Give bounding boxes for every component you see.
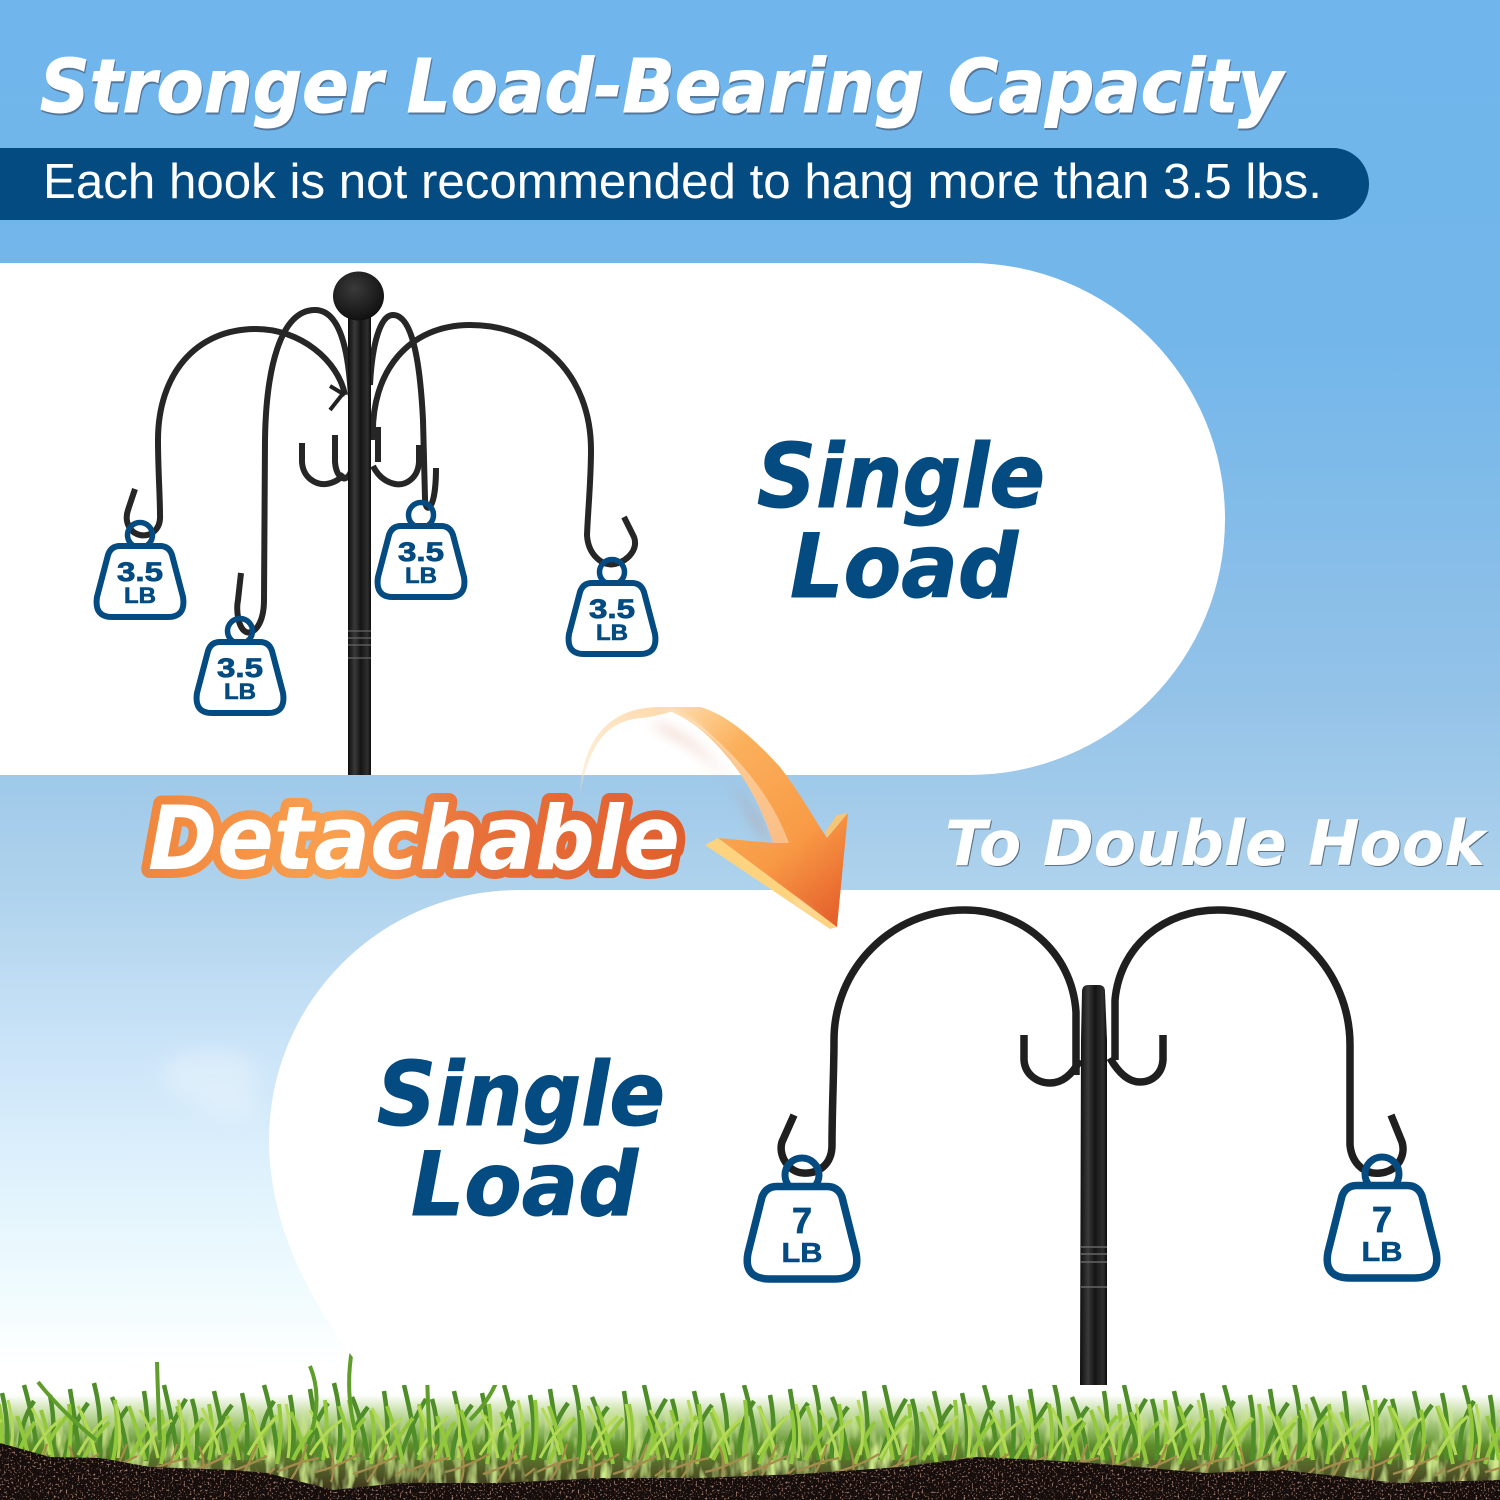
weight: 3.5 lb left: 3.5: [117, 557, 163, 587]
weight: 3.5 lb right: LB: [596, 620, 628, 645]
pole: [1080, 985, 1107, 1385]
arrow tail swoosh: [580, 707, 690, 793]
detachable label: Detachable: [148, 787, 680, 890]
subtitle text: Each hook is not recommended to hang more than 3.5 lbs.: [43, 154, 1322, 209]
weight: 3.5 lb lower left: [197, 618, 283, 713]
weight: 3.5 lb centre: [378, 502, 464, 597]
weight: 3.5 lb centre: LB: [405, 563, 437, 588]
pole rings: [348, 631, 371, 658]
to double hook label: To Double Hook: [945, 807, 1489, 880]
pole rings: [1081, 1247, 1107, 1287]
title: Stronger Load-Bearing Capacity: [40, 44, 1286, 130]
soil: [0, 1443, 1500, 1500]
arrow shadow: [650, 722, 775, 850]
hooks: [781, 910, 1403, 1173]
top label: Single Load: Single: [757, 425, 1045, 528]
arrow inner highlight: [680, 712, 789, 843]
weight: 3.5 lb lower left: 3.5: [217, 653, 263, 683]
curved arrow: [580, 707, 848, 929]
weight: 3.5 lb centre: 3.5: [398, 537, 444, 567]
ball finial: [333, 272, 384, 320]
weight: 3.5 lb lower left: LB: [224, 679, 256, 704]
four-hook stand: [127, 272, 635, 775]
top label: Single Load: [757, 425, 1045, 618]
arrow bottom edge: [705, 838, 837, 929]
weight: 3.5 lb right: [569, 560, 655, 654]
arrow glint: [660, 707, 826, 921]
weight: 7 lb right: 7: [1372, 1199, 1392, 1240]
bottom label: Single Load: Single: [377, 1043, 665, 1146]
weight: 7 lb left: LB: [781, 1237, 823, 1268]
panel: bottom white rounded panel: [269, 890, 1500, 1385]
arrow back barb: [825, 813, 848, 838]
pole: [348, 315, 371, 775]
weight: 7 lb left: 7: [792, 1200, 812, 1241]
weight: 3.5 lb left: LB: [124, 583, 156, 608]
grass blades: [0, 1350, 1500, 1495]
weight: 3.5 lb left: [97, 522, 183, 617]
weight: 7 lb right: [1327, 1157, 1437, 1278]
panel: top white rounded panel: [0, 263, 1225, 775]
top label: Single Load: Load: [790, 515, 1019, 618]
weight: 7 lb left: [747, 1158, 857, 1279]
wing nut: [330, 386, 345, 410]
clouds: [162, 1049, 258, 1117]
subtitle banner: [0, 148, 1369, 220]
hooks: [127, 310, 635, 632]
weight: 7 lb right: LB: [1361, 1236, 1403, 1267]
weight: 3.5 lb right: 3.5: [589, 594, 635, 624]
two-hook stand: [781, 910, 1403, 1385]
bottom label: Single Load: [377, 1043, 665, 1236]
bottom label: Single Load: Load: [411, 1133, 639, 1236]
grass and soil strip: [0, 1350, 1500, 1500]
arrow body: [660, 707, 848, 927]
